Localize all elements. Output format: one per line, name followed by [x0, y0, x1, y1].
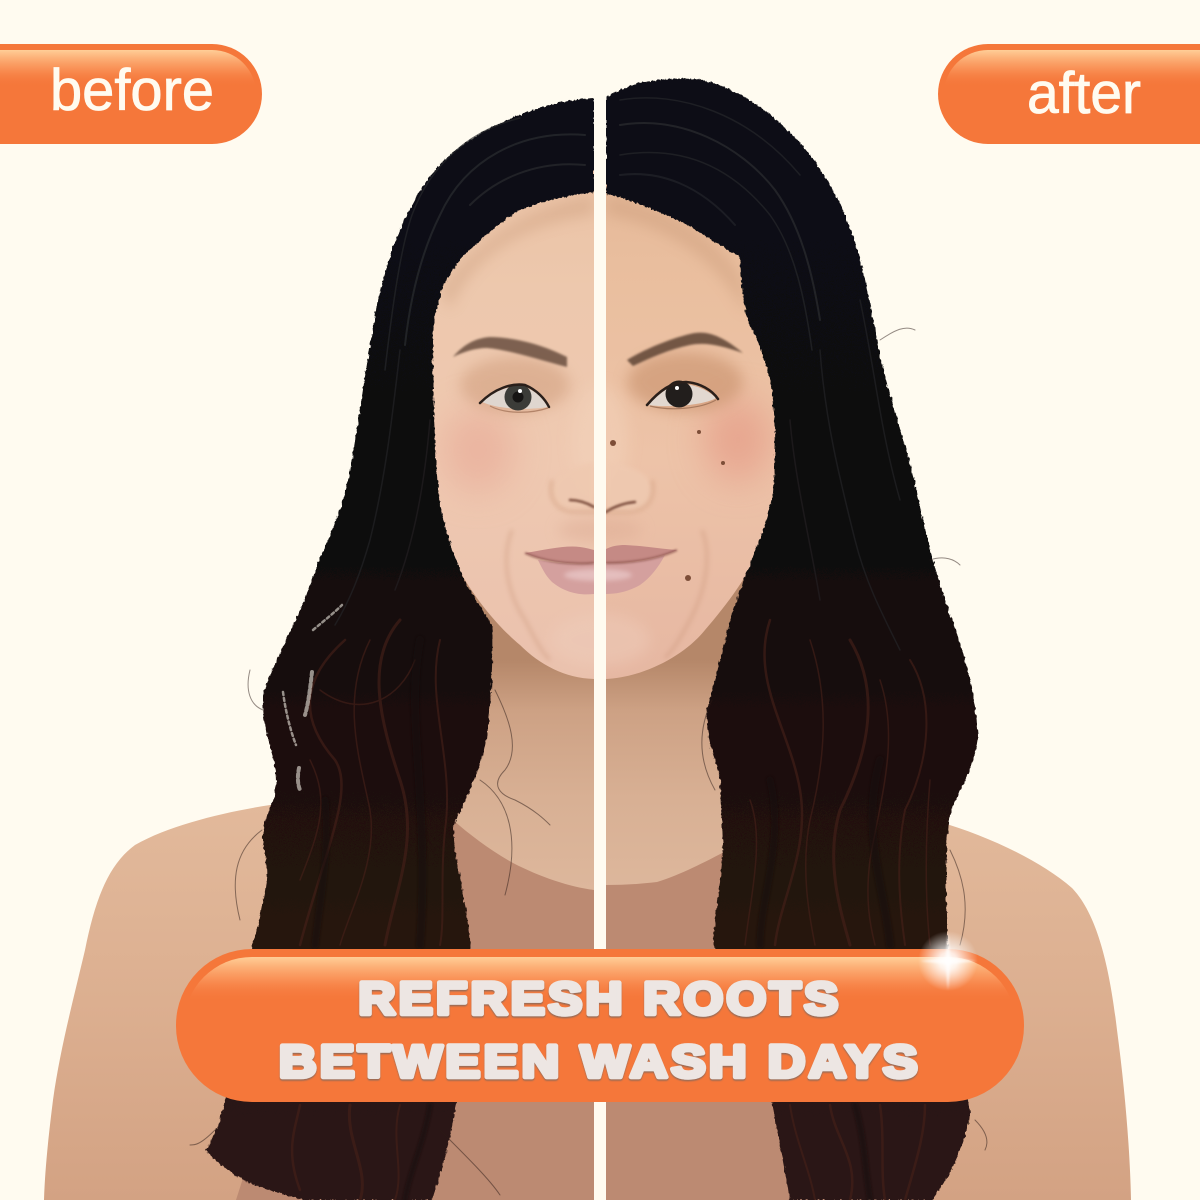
- flyaway wisps: [190, 328, 987, 1195]
- eyebrow: before: [453, 337, 567, 367]
- forehead shadow under hairline: [440, 195, 745, 315]
- before badge: [0, 44, 262, 144]
- left shoulder and arm: [44, 805, 480, 1200]
- face base: before side: [423, 170, 594, 679]
- upper lip: [525, 545, 677, 564]
- lower lip: [538, 555, 665, 594]
- eye: before: [480, 384, 549, 412]
- headline text: BETWEEN WASH DAYS: [279, 1036, 921, 1087]
- headline text: [279, 973, 921, 1087]
- top garment: [236, 820, 932, 1200]
- smile lines: [506, 530, 707, 660]
- face shading: [440, 195, 772, 666]
- nose shadow: [551, 480, 653, 512]
- right shoulder and arm: [720, 820, 1131, 1200]
- hair strands: top sheen: [335, 98, 900, 650]
- centre divider: [594, 90, 606, 1200]
- hair: right side: [606, 79, 978, 1200]
- sparkle: [918, 931, 978, 991]
- cheek blush: before: [442, 408, 514, 492]
- eyebrow: after: [627, 333, 743, 366]
- face base: after side: [606, 170, 785, 679]
- chin glow: [550, 614, 650, 666]
- hair: [190, 79, 987, 1200]
- hair dark streaks: [315, 640, 890, 1200]
- pill top highlight: [194, 957, 1005, 990]
- cheek blush: after: [704, 398, 772, 482]
- hair: left side: [205, 98, 594, 1200]
- before badge: before: [50, 58, 214, 123]
- lip line: [525, 550, 677, 564]
- nose bridge highlight: [572, 385, 628, 495]
- headline text: REFRESH ROOTS: [358, 973, 842, 1024]
- philtrum shade: [558, 518, 642, 542]
- headline pill: [176, 949, 1024, 1102]
- eye socket shadow: after: [627, 352, 743, 412]
- after badge: [938, 44, 1200, 144]
- eye socket shadow: before: [460, 357, 570, 413]
- eye: after: [647, 380, 718, 409]
- hair light gaps: [283, 605, 342, 790]
- after badge: after: [1027, 61, 1141, 126]
- hair strands: reddish lengths: [292, 620, 930, 1200]
- lips: [525, 545, 677, 594]
- neck and chest: [440, 540, 770, 900]
- nostrils: [570, 500, 635, 512]
- nose tip: [552, 462, 652, 512]
- lip highlight: [564, 569, 632, 581]
- moles: [610, 430, 725, 581]
